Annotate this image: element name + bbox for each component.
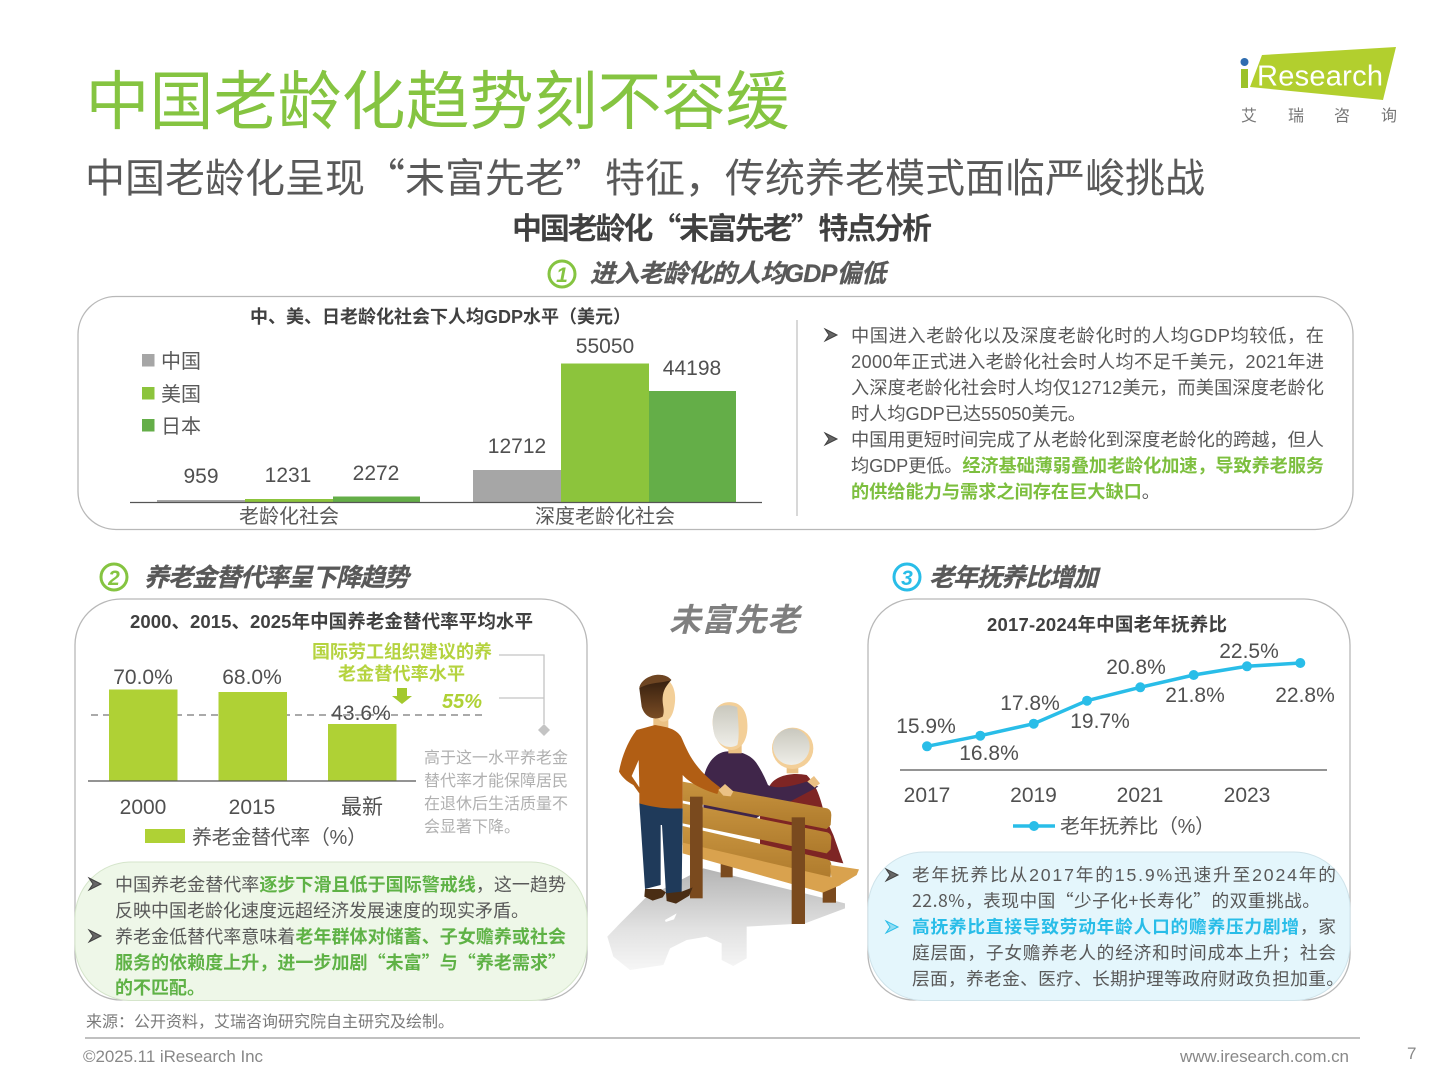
text block: dependency analysis: 老年抚养比从2017年的15.9%迅速升至2024年的 [912,865,1336,885]
text block: pension analysis: 反映中国老龄化速度远超经济发展速度的现实矛盾。 [115,901,529,921]
line chart: dependency: 20.8% [1106,656,1166,679]
logo: iResearch [1240,47,1397,125]
logo: iResearch: 咨 [1334,107,1350,125]
panel: GDP [78,296,1353,530]
legend: dependency: 老年抚养比（%） [1060,815,1215,838]
bar chart: pension: 最新 [341,796,383,819]
text block: pension analysis: 中国养老金替代率逐步下滑且低于国际警戒线，这一趋势 [115,875,566,895]
chart title: dependency: 2017-2024年中国老年抚养比 [987,614,1227,635]
line chart: dependency: 21.8% [1165,684,1225,707]
text block: GDP analysis: 中国用更短时间完成了从老龄化到深度老龄化的跨越，但人 [851,430,1324,450]
title: 中国老龄化趋势刻不容缓 [86,66,790,138]
chart title: GDP: 中、美、日老龄化社会下人均GDP水平（美元） [250,306,631,327]
text block: pension analysis: 的不匹配。 [115,978,205,998]
line chart: dependency: 2021 [1117,784,1163,807]
callout: ILO level: 会显著下降。 [424,818,520,836]
panel: pension [75,599,587,1000]
text block: dependency analysis [868,852,1350,1000]
line chart: dependency [896,640,1335,807]
legend: GDP: 日本 [161,415,201,438]
line chart: dependency: 19.7% [1070,710,1130,733]
chart title: pension: 2000、2015、2025年中国养老金替代率平均水平 [130,611,533,632]
line chart: dependency: 22.5% [1219,640,1279,663]
text block: dependency analysis: 高抚养比直接导致劳动年龄人口的赡养压力剧增，家 [912,916,1336,937]
heading 3: dependency: 3 [901,567,913,590]
subtitle: 中国老龄化呈现“未富先老”特征，传统养老模式面临严峻挑战 [85,146,1205,204]
heading 2: pension: 2 [107,567,120,590]
callout: ILO level [312,641,568,836]
heading 3: dependency: 老年抚养比增加 [929,564,1101,592]
bar chart: GDP: 1231 [265,464,311,487]
text block: dependency analysis: 层面，养老金、医疗、长期护理等政府财政负担加重。 [912,969,1344,989]
line chart: dependency: 17.8% [1000,692,1060,715]
callout: ILO level: 高于这一水平养老金 [424,749,568,767]
text block: GDP analysis: 时人均GDP已达55050美元。 [851,404,1086,424]
callout: ILO level: 在退休后生活质量不 [424,795,568,813]
bar chart: GDP [130,335,762,528]
text block: dependency analysis: 22.8%，表现中国“少子化+长寿化”的双重挑战。 [912,887,1320,913]
footer website: www.iresearch.com.cn [1179,1047,1349,1066]
callout: ILO level: 替代率才能保障居民 [424,772,568,790]
bar chart: pension [88,666,486,819]
callout: ILO level: 国际劳工组织建议的养 [312,641,492,662]
line chart: dependency: 22.8% [1275,684,1335,707]
bar chart: pension: 68.0% [222,666,282,689]
section heading: 中国老龄化“未富先老”特点分析 [512,204,932,248]
bar chart: GDP: 959 [183,465,219,488]
logo: iResearch: 艾 [1241,107,1257,125]
center label: 未富先老 [669,602,803,638]
bar chart: GDP: 12712 [488,435,546,458]
text block: GDP analysis: 的供给能力与需求之间存在巨大缺口。 [851,481,1160,502]
line chart: dependency: 2023 [1224,784,1270,807]
bar chart: GDP: 深度老龄化社会 [535,505,675,528]
text block: GDP analysis: 入深度老龄化社会时人均仅12712美元，而美国深度老龄化 [851,378,1324,398]
text block: GDP analysis [825,326,1324,502]
heading 1: low GDP: 进入老龄化的人均GDP偏低 [590,260,890,288]
heading 2: pension: 养老金替代率呈下降趋势 [144,564,412,592]
bar chart: pension: 2000 [120,796,166,819]
text block: GDP analysis: 均GDP更低。经济基础薄弱叠加老龄化加速，导致养老服务 [851,455,1324,476]
legend: GDP: 中国 [161,350,201,373]
bar chart: GDP: 44198 [663,357,721,380]
line chart: dependency: 2019 [1010,784,1057,807]
illustration: family on bench [607,675,859,970]
bar chart: pension: 2015 [229,796,275,819]
legend: pension: 养老金替代率（%） [192,826,367,849]
line chart: dependency: 15.9% [896,715,956,738]
bar chart: GDP: 2272 [353,462,399,485]
line chart: dependency: 2017 [904,784,950,807]
footer copyright: ©2025.11 iResearch Inc [83,1047,264,1066]
callout: ILO level: 老金替代率水平 [338,663,465,684]
panel: dependency [868,599,1350,1000]
logo: iResearch: 询 [1381,107,1397,125]
heading 1: low GDP: 1 [556,264,568,287]
callout: ILO level: 55% [442,691,482,713]
source note: 来源：公开资料，艾瑞咨询研究院自主研究及绘制。 [86,1013,454,1031]
bar chart: pension: 43.6% [331,702,391,725]
bar chart: pension: 70.0% [113,666,173,689]
text block: GDP analysis: 2000年正式进入老龄化社会时人均不足千美元，2021年进 [851,352,1324,372]
logo: iResearch: 瑞 [1288,107,1304,125]
legend: GDP: 美国 [161,383,201,406]
text block: GDP analysis: 中国进入老龄化以及深度老龄化时的人均GDP均较低，在 [851,326,1324,346]
text block: dependency analysis: 庭层面，子女赡养老人的经济和时间成本上升；社会 [912,943,1336,963]
line chart: dependency: 16.8% [959,742,1019,765]
legend: GDP [142,350,201,438]
text block: pension analysis: 服务的依赖度上升，进一步加剧“未富”与“养老需求” [115,949,566,975]
logo: iResearch: Research [1257,60,1383,92]
page number: 7 [1407,1044,1416,1063]
bar chart: GDP: 老龄化社会 [239,505,339,528]
text block: pension analysis [75,862,587,1000]
bar chart: GDP: 55050 [576,335,634,358]
text block: pension analysis: 养老金低替代率意味着老年群体对储蓄、子女赡养或社会 [115,926,566,947]
